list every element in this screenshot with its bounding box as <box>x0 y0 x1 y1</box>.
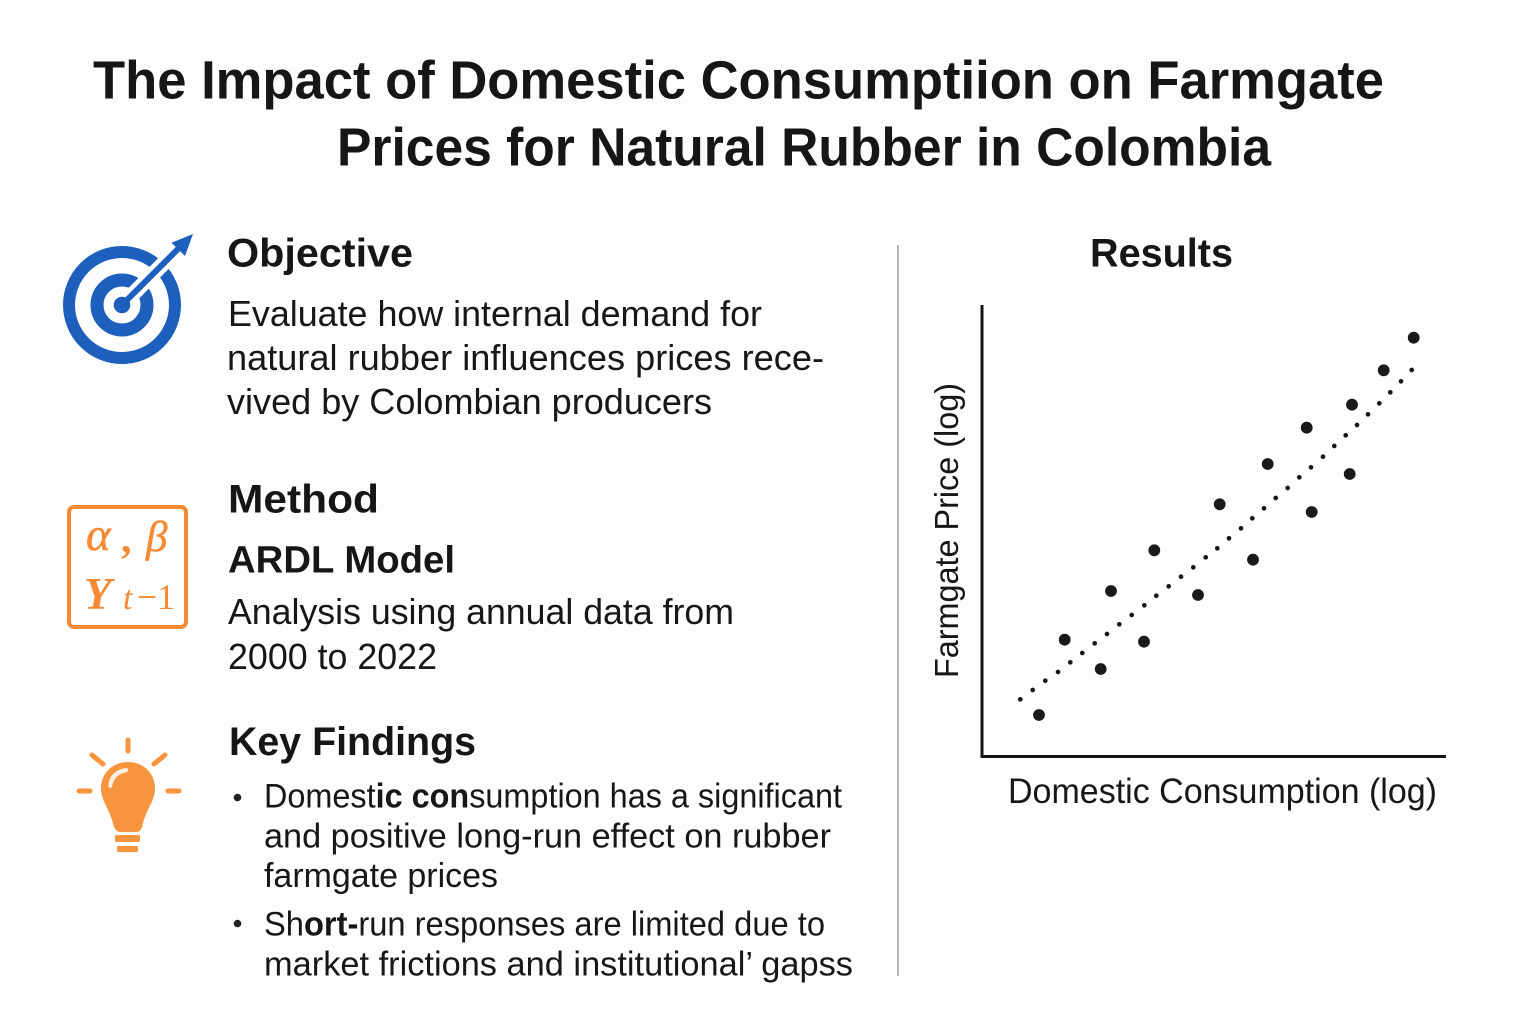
bullet: long-run effect: Domestic consumption has a significant <box>264 778 843 816</box>
icon: target with arrow <box>69 234 193 358</box>
bullet: short-run responses: market frictions and institutional’ gapss <box>264 946 853 984</box>
panel: key findings <box>229 720 853 984</box>
panel: objective <box>227 232 824 422</box>
text: method description: 2000 to 2022 <box>228 636 437 677</box>
icon: formula box: Y <box>84 569 115 619</box>
x-axis label: Domestic Consumption (log) <box>1008 772 1437 811</box>
trend line <box>1020 370 1412 699</box>
heading: method: Method <box>228 478 379 522</box>
heading: results: Results <box>1090 232 1233 276</box>
y-axis label: Farmgate Price (log) <box>928 383 965 678</box>
bullet: long-run effect <box>234 778 843 895</box>
icon: formula box: α <box>86 509 112 561</box>
bullet: long-run effect: and positive long-run effect on rubber <box>264 818 831 856</box>
icon: formula box: −1 <box>137 577 175 617</box>
heading: key findings: Key Findings <box>229 720 476 764</box>
text: method description: Analysis using annual data from <box>228 591 734 632</box>
panel: method <box>228 478 734 677</box>
text: objective description <box>227 293 824 422</box>
title: Prices for Natural Rubber in Colombia <box>337 118 1272 178</box>
text: method description <box>228 591 734 677</box>
title <box>93 50 1384 178</box>
text: objective description: natural rubber influences prices rece- <box>227 337 824 378</box>
subheading: ARDL model: ARDL Model <box>228 540 455 582</box>
text: objective description: Evaluate how internal demand for <box>228 293 762 334</box>
icon: formula box <box>69 507 186 627</box>
bullet: short-run responses <box>234 906 853 984</box>
bullet: short-run responses: Short-run responses are limited due to <box>264 906 825 944</box>
heading: objective: Objective <box>227 232 413 276</box>
chart: scatter plot <box>928 305 1446 811</box>
icon: formula box: , <box>121 516 132 562</box>
icon: light bulb <box>79 740 179 852</box>
text: objective description: vived by Colombian producers <box>227 381 712 422</box>
icon: formula box: β <box>145 514 168 561</box>
axes <box>982 305 1446 756</box>
icon: formula box: t <box>123 580 134 617</box>
data points <box>1033 332 1420 721</box>
title: The Impact of Domestic Consumptiion on Farmgate <box>93 50 1384 110</box>
bullet: long-run effect: farmgate prices <box>264 857 498 895</box>
